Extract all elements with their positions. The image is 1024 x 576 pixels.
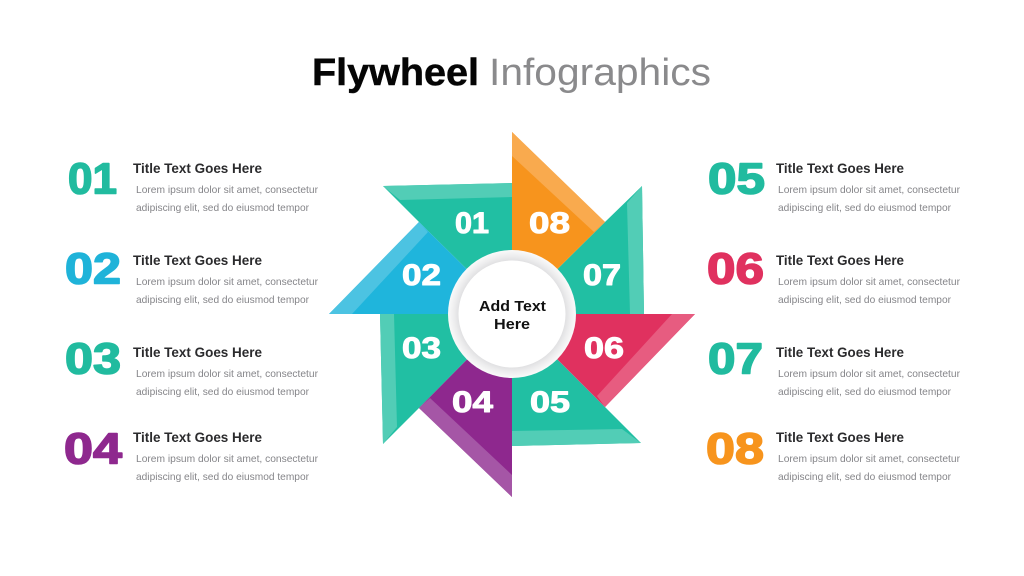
item 07: Title Text Goes Here [776,345,904,360]
item 08: adipiscing elit, sed do eiusmod tempor [778,472,952,483]
title: Flywheel [312,52,479,94]
item 03: Lorem ipsum dolor sit amet, consectetur [136,369,319,380]
title: Infographics [489,52,711,94]
item 07 [708,334,961,398]
blade 05 [512,314,641,446]
item 07: Lorem ipsum dolor sit amet, consectetur [778,369,961,380]
blade 06: 06 [584,332,624,365]
item 01: 01 [68,154,117,204]
item 05: 05 [708,154,765,204]
center hub: Add Text [479,298,546,315]
blade 07 [512,186,644,314]
item 05: Lorem ipsum dolor sit amet, consectetur [778,185,961,196]
item 02: Title Text Goes Here [133,253,262,268]
item 03: 03 [65,334,121,384]
item 08: 08 [706,424,764,474]
blade 08 [512,132,605,314]
item 07: 07 [708,334,763,384]
blade 02: 02 [402,259,441,292]
item 04: adipiscing elit, sed do eiusmod tempor [136,472,310,483]
blade 03: 03 [402,332,441,365]
item 03 [65,334,319,398]
blade 03 [380,314,512,444]
item 03: adipiscing elit, sed do eiusmod tempor [136,387,310,398]
item 06 [707,244,961,306]
item 01 [68,154,319,214]
blade 07: 07 [583,259,621,292]
blade 01: 01 [455,207,489,240]
item 03: Title Text Goes Here [133,345,262,360]
item 02: adipiscing elit, sed do eiusmod tempor [136,295,310,306]
item 06: adipiscing elit, sed do eiusmod tempor [778,295,952,306]
item 01: Title Text Goes Here [133,161,262,176]
item 07: adipiscing elit, sed do eiusmod tempor [778,387,952,398]
title [312,52,711,94]
item 05 [708,154,961,214]
flywheel diagram [329,132,695,497]
item 04: Title Text Goes Here [133,430,262,445]
item 06: Title Text Goes Here [776,253,904,268]
blade 06 [512,314,695,407]
blade 02 [329,222,512,314]
item 08 [706,424,961,483]
item 02 [65,244,319,306]
item 04 [64,424,319,483]
item 04: Lorem ipsum dolor sit amet, consectetur [136,454,319,465]
blade 01 [383,183,512,314]
center hub: Here [494,316,530,333]
item 06: Lorem ipsum dolor sit amet, consectetur [778,277,961,288]
blade 04 [419,314,512,497]
item 02: 02 [65,244,121,294]
blade 05: 05 [530,386,570,419]
item 05: Title Text Goes Here [776,161,904,176]
item 01: adipiscing elit, sed do eiusmod tempor [136,203,310,214]
blade 08: 08 [529,207,570,240]
item 06: 06 [707,244,764,294]
item 02: Lorem ipsum dolor sit amet, consectetur [136,277,319,288]
item 08: Lorem ipsum dolor sit amet, consectetur [778,454,961,465]
item 01: Lorem ipsum dolor sit amet, consectetur [136,185,319,196]
blade 04: 04 [452,386,493,419]
item 08: Title Text Goes Here [776,430,904,445]
item 05: adipiscing elit, sed do eiusmod tempor [778,203,952,214]
item 04: 04 [64,424,123,474]
center hub [448,250,576,378]
